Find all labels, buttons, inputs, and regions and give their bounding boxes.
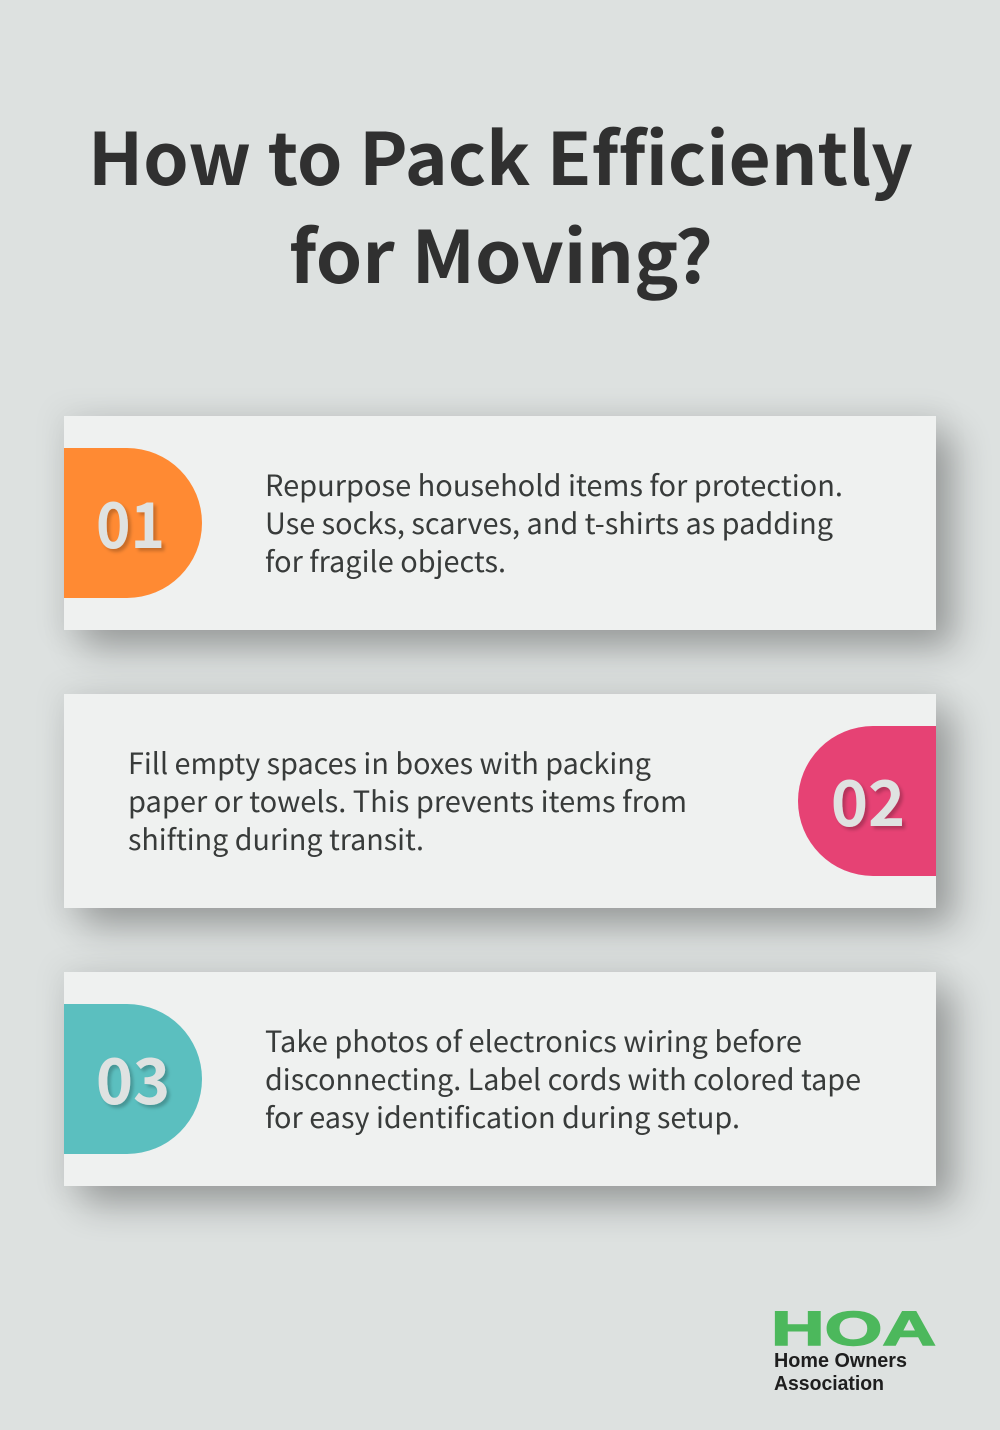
- text: step 1 description: Repurpose household items for protection.: [265, 463, 843, 505]
- badge: 03: 03: [96, 1032, 170, 1123]
- panel: step 3: [54, 962, 954, 1204]
- panel: step 2: [54, 684, 954, 926]
- text: step 1 description: [265, 463, 843, 581]
- text: step 1 description: for fragile objects.: [265, 539, 506, 581]
- text: step 2 description: shifting during transit.: [128, 817, 424, 859]
- logo: HOA Home Owners Association: Home Owners: [774, 1350, 907, 1372]
- text: step 2 description: Fill empty spaces in boxes with packing: [128, 741, 651, 783]
- title: How to Pack Efficiently: [88, 101, 913, 206]
- badge: 02: 02: [831, 754, 905, 845]
- badge: 02: [798, 726, 936, 876]
- text: step 2 description: [128, 741, 687, 859]
- text: step 3 description: [265, 1019, 861, 1137]
- title: for Moving?: [289, 199, 713, 304]
- title: [88, 101, 913, 304]
- panel: step 1: [54, 406, 954, 648]
- badge: 01: [64, 448, 202, 598]
- text: step 3 description: for easy identification during setup.: [265, 1095, 740, 1137]
- badge: 01: 01: [96, 476, 165, 567]
- text: step 3 description: disconnecting. Label cords with colored tape: [265, 1057, 861, 1099]
- logo: HOA Home Owners Association: Association: [774, 1373, 884, 1395]
- text: step 1 description: Use socks, scarves, and t-shirts as padding: [265, 501, 833, 543]
- logo: HOA Home Owners Association: [771, 1303, 936, 1395]
- text: step 2 description: paper or towels. This prevents items from: [128, 779, 687, 821]
- logo: HOA Home Owners Association: HOA: [771, 1303, 936, 1356]
- text: step 3 description: Take photos of electronics wiring before: [265, 1019, 802, 1061]
- badge: 03: [64, 1004, 202, 1154]
